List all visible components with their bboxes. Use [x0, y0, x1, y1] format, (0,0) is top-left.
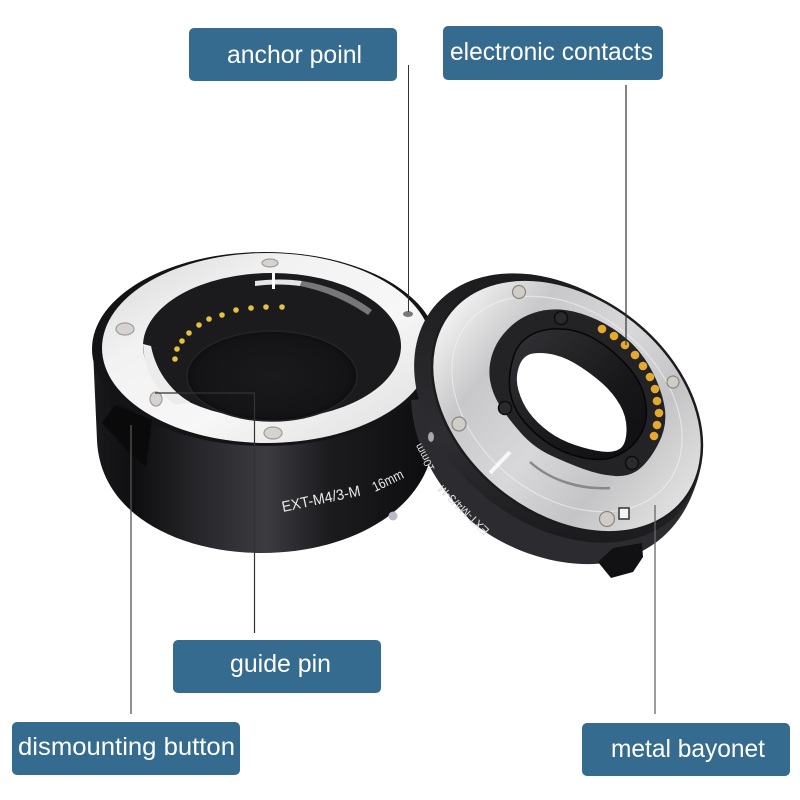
bayonet highlight — [490, 452, 510, 473]
label: guide pin — [173, 640, 381, 693]
leader line: anchor point — [408, 65, 410, 312]
inner opening — [143, 273, 401, 419]
square contact — [619, 508, 629, 519]
leader line: metal bayonet — [654, 505, 656, 714]
lens opening — [517, 353, 627, 452]
label: guide pin: guide pin — [230, 650, 331, 678]
lug highlight — [272, 273, 275, 289]
silver bayonet — [382, 228, 752, 584]
inner grey lug — [300, 281, 372, 315]
label: anchor point — [189, 28, 397, 81]
outer black rim — [361, 218, 755, 598]
right extension tube 10mm — [361, 218, 755, 598]
silver mount ring — [102, 253, 432, 443]
tube body — [93, 350, 438, 553]
leader line: guide pin — [155, 393, 254, 633]
ring side wall — [411, 380, 703, 564]
label: electronic contacts: electronic contacts — [450, 38, 653, 66]
label: anchor point: anchor poinl — [227, 41, 362, 69]
rim model text: EXT-M4/3-M — [435, 482, 492, 538]
black inner ring — [489, 309, 665, 476]
leader line: dismounting button — [130, 425, 132, 714]
silver tab left of the opening — [143, 344, 190, 405]
inner barrel — [509, 329, 646, 460]
label: metal bayonet: metal bayonet — [611, 735, 765, 763]
bayonet concentric line — [410, 252, 724, 556]
alignment dot — [388, 512, 398, 520]
black inner screws — [498, 312, 638, 470]
gold contact pins — [172, 304, 285, 362]
inner well — [187, 331, 357, 421]
label: metal bayonet — [582, 723, 790, 776]
model text: EXT-M4/3-M — [280, 483, 362, 516]
bayonet dark thread line — [530, 462, 610, 488]
leader line: electronic contacts — [625, 85, 627, 345]
silver screws — [452, 286, 679, 526]
label: dismounting button — [12, 722, 240, 775]
anchor point dot — [403, 311, 413, 317]
rim dot — [428, 432, 434, 442]
inner bright lug — [255, 280, 302, 286]
release tab — [598, 543, 643, 578]
top rim — [92, 252, 438, 446]
dismounting button — [102, 405, 152, 467]
rim size text: 10mm — [413, 441, 438, 473]
label: electronic contacts — [443, 26, 663, 80]
left extension tube 16mm — [92, 252, 438, 553]
mount screws — [116, 259, 282, 439]
label: dismounting button: dismounting button — [18, 733, 235, 761]
gold electronic contacts — [598, 325, 663, 440]
size text: 16mm — [369, 466, 406, 495]
